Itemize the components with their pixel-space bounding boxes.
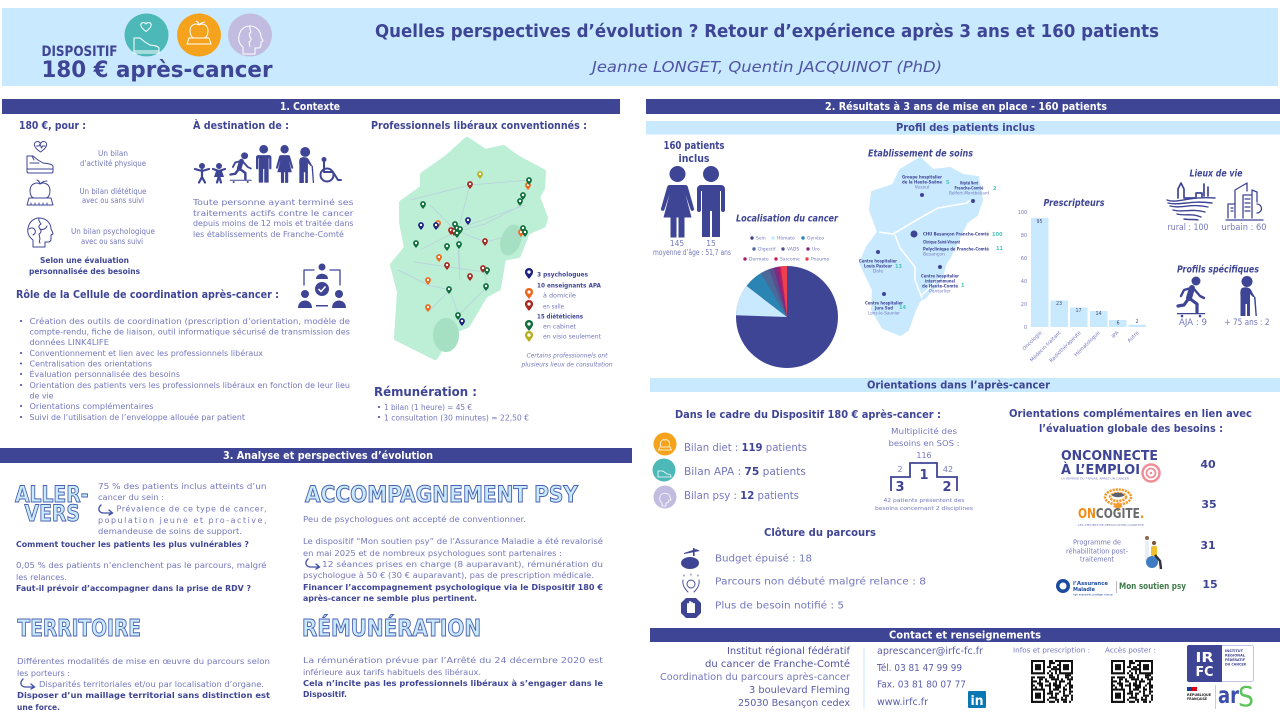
block: territoire: TERRITOIRE xyxy=(18,616,141,642)
logo: assurance maladie: Maladie xyxy=(1073,587,1095,593)
map labels: Besançon xyxy=(923,252,945,258)
logo: onconnecte: LA REPRISE DU TRAVAIL APRÈS UN CANCER xyxy=(1061,476,1129,480)
map labels: 13 xyxy=(895,264,902,270)
block: aller-vers: cancer du sein : xyxy=(98,493,164,502)
chart: prescripteurs: Oncologie xyxy=(1021,330,1043,352)
icon: psy badge xyxy=(228,14,272,56)
map labels: 2 xyxy=(993,186,997,192)
block: orientations complementaires: Orientations complémentaires en lien avec xyxy=(1009,408,1252,420)
icon: psy circle xyxy=(654,486,676,508)
heading: analyse: 3. Analyse et perspectives d’évolution xyxy=(223,450,433,462)
pie legend: Pneumo xyxy=(811,257,829,263)
block: lieux de vie: Lieux de vie xyxy=(1190,168,1243,180)
map labels: Jura Sud xyxy=(874,306,893,312)
block: bilans counts: Bilan psy : 12 patients xyxy=(684,490,799,502)
icon: rural xyxy=(1167,183,1215,220)
logo: onconnecte xyxy=(1061,448,1160,482)
pie legend: Sein xyxy=(756,236,766,242)
address: du cancer de Franche-Comté xyxy=(705,659,850,670)
block: aller-vers: demandeuse de soins de support. xyxy=(98,527,242,536)
text: rehabilitation programme: Programme de xyxy=(1073,538,1121,546)
icon: coordination xyxy=(298,264,346,308)
logo: oncogite: ONCOGITE. xyxy=(1078,507,1144,522)
map legend: 15 diététiciens xyxy=(537,312,583,320)
contact details: Tél. 03 81 47 99 99 xyxy=(876,663,962,674)
block: role de la cellule: Rôle de la Cellule de coordination après-cancer : xyxy=(16,289,279,301)
logo: ars: ar xyxy=(1218,683,1240,709)
heading: resultats xyxy=(646,99,1280,114)
map labels: 11 xyxy=(996,246,1003,252)
qr: infos: Infos et prescription : xyxy=(1013,646,1090,654)
block: patients count: 160 patients xyxy=(664,140,724,152)
contact details: aprescancer@irfc-fc.fr xyxy=(877,646,983,657)
pie legend: Sarcome xyxy=(780,257,800,263)
block: territoire: Différentes modalités de mise en œuvre du parcours selon xyxy=(17,656,270,666)
contact details xyxy=(876,646,983,708)
arrow: psy xyxy=(306,559,320,569)
block: remuneration: Rémunération : xyxy=(374,384,477,399)
block: lieux de vie: rural : 100 xyxy=(1168,223,1208,233)
pie legend: Uro xyxy=(812,247,820,253)
chart: prescripteurs: 80 xyxy=(1021,233,1027,239)
logo: assurance maladie: Mon soutien psy xyxy=(1119,582,1186,592)
chart: prescripteurs: 17 xyxy=(1075,308,1082,314)
map legend: à domicile xyxy=(543,292,576,300)
block: orientations complementaires: 15 xyxy=(1202,578,1218,591)
pie legend: Hémato xyxy=(777,235,795,242)
block: remuneration: 1 consultation (30 minutes) = 22,50 € xyxy=(384,414,529,422)
panel: contact xyxy=(650,628,1280,713)
block: lieux de vie xyxy=(1167,168,1266,233)
map labels: Centre hospitalier xyxy=(859,258,898,264)
heading: contact xyxy=(650,628,1280,642)
logo: ars xyxy=(1215,680,1254,713)
pie slices xyxy=(736,266,838,368)
text: rehabilitation programme: réhabilitation post- xyxy=(1066,548,1129,556)
block: territoire: une force. xyxy=(17,703,60,712)
icon: apa circle xyxy=(652,458,676,482)
audience text: depuis moins de 12 mois et traitée dans xyxy=(193,218,354,228)
block: aller-vers: ALLER- xyxy=(15,483,88,508)
role list: compte-rendu, fiche de liaison, outil informatique sécurisé de transmission des xyxy=(30,326,350,336)
chart: prescripteurs: 2 xyxy=(1135,319,1139,325)
map: etablissements xyxy=(859,148,1003,335)
logo: irfc: FC xyxy=(1196,665,1214,680)
subheading: profil xyxy=(646,121,1280,134)
role list xyxy=(20,316,350,422)
text: rehabilitation programme xyxy=(1066,538,1129,564)
block: cloture du parcours: Budget épuisé : 18 xyxy=(715,552,812,564)
chart: prescripteurs: Médecin traitant xyxy=(1028,329,1062,364)
block: 180 euros pour xyxy=(19,120,155,276)
map legend: en visio seulement xyxy=(543,332,601,340)
header band xyxy=(2,8,1278,86)
map labels: Louis Pasteur xyxy=(864,264,893,270)
block: cloture du parcours: Clôture du parcours xyxy=(764,527,876,539)
map labels: Centre hospitalier xyxy=(865,300,904,306)
icon: exercise figure xyxy=(1145,536,1161,569)
evaluation note xyxy=(29,255,140,276)
block: remuneration analysis: RÉMUNÉRATION xyxy=(302,614,481,642)
address: 25030 Besançon cedex xyxy=(738,698,850,709)
role list: Évaluation personnalisée des besoins xyxy=(30,368,180,379)
block: lieux de vie: urbain : 60 xyxy=(1222,223,1266,233)
chart: besoins podium: besoins concernant 2 disciplines xyxy=(875,506,973,512)
address: 3 boulevard Fleming xyxy=(749,685,850,696)
map labels: de Haute-Comté xyxy=(922,282,958,290)
logo: assurance maladie: Agir ensemble, protéger chacun xyxy=(1073,592,1113,596)
map legend: 3 psychologues xyxy=(537,270,588,278)
block: accompagnement psy: psychologue à 50 € (30 € auparavant), pas de prescription médicale. xyxy=(303,570,594,580)
logo: onconnecte: ONCONNECTE xyxy=(1061,448,1158,464)
text: rehabilitation programme: traitement xyxy=(1080,556,1114,564)
chart: prescripteurs: 23 xyxy=(1056,301,1062,307)
icon: brain xyxy=(28,218,53,247)
map legend: 10 enseignants APA xyxy=(537,282,601,290)
panel: resultats xyxy=(646,99,1280,618)
block: territoire xyxy=(17,616,270,712)
chart: besoins podium: 1 xyxy=(919,468,929,483)
block: accompagnement psy: 12 séances prises en charge (8 auparavant), rémunération du xyxy=(322,559,603,569)
subheading: orientations: Orientations dans l’après-cancer xyxy=(867,380,1051,392)
block: aller-vers: VERS xyxy=(24,502,80,527)
map labels: Lons-le-Saunier xyxy=(868,310,900,316)
chart: prescripteurs: Prescripteurs xyxy=(1044,198,1105,209)
chart: besoins podium: 2 xyxy=(897,465,903,474)
logo: republique francaise: FRANÇAISE xyxy=(1187,697,1207,701)
icon: diet badge xyxy=(177,14,221,56)
logo wordmark xyxy=(42,44,273,83)
chart: prescripteurs: 95 xyxy=(1036,219,1043,225)
block: bilans counts: Bilan diet : 119 patients xyxy=(684,442,807,454)
block: accompagnement psy: Peu de psychologues ont accepté de conventionner. xyxy=(303,514,526,524)
icon: shoe xyxy=(27,142,53,173)
chart: prescripteurs: IPA xyxy=(1111,330,1121,340)
logo: irfc xyxy=(1187,645,1254,682)
map legend: Certains professionnels ont xyxy=(526,352,608,360)
role list: Conventionnement et lien avec les professionnels libéraux xyxy=(30,348,263,358)
icon: skater xyxy=(1177,276,1205,317)
address: Institut régional fédératif xyxy=(727,646,851,657)
block: patients count: moyenne d’âge : 51,7 ans xyxy=(653,248,731,257)
chart: besoins podium: 42 xyxy=(943,465,953,474)
chart: prescripteurs: 6 xyxy=(1116,320,1120,326)
block: aller-vers: Prévalence de ce type de cancer, xyxy=(116,504,266,514)
evaluation note: personnalisée des besoins xyxy=(29,266,140,276)
block: aller-vers xyxy=(15,482,267,593)
block: orientations complementaires xyxy=(1009,408,1252,596)
map legend: en salle xyxy=(543,302,564,310)
role list: Centralisation des orientations xyxy=(30,360,152,368)
chart: besoins podium: besoins en SOS : xyxy=(888,439,960,448)
subheading: orientations xyxy=(650,378,1280,392)
map legend: en cabinet xyxy=(543,322,576,330)
evaluation note: Selon une évaluation xyxy=(40,255,129,265)
icon: people row xyxy=(195,145,341,183)
block: profils specifiques: + 75 ans : 2 xyxy=(1224,318,1270,328)
audience text: les établissements de Franche-Comté xyxy=(193,229,344,239)
map labels xyxy=(859,174,1003,316)
chart: besoins podium xyxy=(875,426,973,512)
block: accompagnement psy: ACCOMPAGNEMENT PSY xyxy=(305,483,579,508)
map legend xyxy=(521,268,613,368)
block: bilans counts: Dans le cadre du Dispositif 180 € après-cancer : xyxy=(675,409,941,421)
role list: Orientation des patients vers les professionnels libéraux en fonction de leur lieu xyxy=(30,380,350,390)
logo: irfc: DU CANCER xyxy=(1225,662,1246,666)
map labels: 5 xyxy=(946,180,950,186)
block: profils specifiques: AJA : 9 xyxy=(1179,318,1207,328)
block: cloture du parcours xyxy=(681,527,926,618)
map labels: CHU Besançon Franche-Comté xyxy=(923,230,989,238)
map: etablissements: Etablissement de soins xyxy=(868,148,973,160)
heading: contact: Contact et renseignements xyxy=(889,630,1041,642)
audience text xyxy=(192,197,354,239)
contact details: www.irfc.fr xyxy=(877,697,928,708)
authors: Jeanne LONGET, Quentin JACQUINOT (PhD) xyxy=(589,58,942,76)
block: accompagnement psy: en mai 2025 et de nombreux psychologues sont partenaires : xyxy=(303,549,562,558)
block: aller-vers: 75 % des patients inclus atteints d’un xyxy=(98,482,266,491)
map labels: Belfort-Montbéliard xyxy=(949,190,989,196)
chart: prescripteurs: 100 xyxy=(1018,210,1027,216)
logo: irfc: INSTITUT xyxy=(1225,649,1244,653)
pie legend: Digestif xyxy=(758,247,776,253)
icon: activity badge xyxy=(124,14,168,56)
block: patients count: 145 xyxy=(670,239,684,248)
role list: de vie xyxy=(30,392,54,400)
block: territoire: Disposer d’un maillage territorial sans distinction est xyxy=(17,691,270,700)
qr: poster: Accès poster : xyxy=(1105,646,1156,654)
block: territoire: Disparités territoriales et/ou par localisation d’organe. xyxy=(39,679,264,689)
block: remuneration analysis: inférieure aux tarifs habituels des libéraux. xyxy=(303,667,481,677)
block: territoire: les porteurs : xyxy=(17,669,70,678)
icon: woman xyxy=(661,166,694,238)
block: remuneration: 1 bilan (1 heure) = 45 € xyxy=(384,403,472,412)
icon: linkedin: in xyxy=(970,694,984,709)
chart: besoins podium: Multiplicité des xyxy=(891,426,957,436)
map labels: Vesoul xyxy=(915,184,929,190)
block: role de la cellule xyxy=(16,264,350,422)
block: professionnels liberaux: Professionnels libéraux conventionnés : xyxy=(371,120,587,132)
block: orientations complementaires: 40 xyxy=(1200,458,1216,471)
bilans labels: Un bilan psychologique xyxy=(71,227,155,236)
block: cloture du parcours: Parcours non débuté malgré relance : 8 xyxy=(715,576,926,588)
chart: besoins podium: 3 xyxy=(895,480,905,495)
pie legend xyxy=(743,235,829,263)
block: bilans counts: Bilan APA : 75 patients xyxy=(684,466,806,478)
heading: contexte xyxy=(2,99,620,114)
map labels: de la Haute-Saône xyxy=(902,178,942,186)
role list: Création des outils de coordination (prescription d’orientation, modèle de xyxy=(30,316,350,326)
pie legend: VADS xyxy=(787,247,799,253)
logo: irfc: RÉGIONAL xyxy=(1225,652,1246,658)
contact details: Fax. 03 81 80 07 77 xyxy=(877,680,966,690)
bilans labels: Un bilan xyxy=(98,149,128,158)
logo: oncogite: LES ATELIERS DE RÉÉDUCATION COGNITIVE xyxy=(1078,522,1144,527)
chart: prescripteurs xyxy=(1018,198,1146,364)
heading: resultats: 2. Résultats à 3 ans de mise en place - 160 patients xyxy=(825,101,1107,113)
logo: irfc: FÉDÉRATIF xyxy=(1225,657,1246,662)
chart: cancer location pie: Localisation du cancer xyxy=(736,214,839,224)
subheading: profil: Profil des patients inclus xyxy=(896,122,1035,134)
map labels: Franche-Comté xyxy=(954,184,984,192)
panel: contexte xyxy=(2,99,620,422)
block: aller-vers: Faut-il prévoir d’accompagner dans la prise de RDV ? xyxy=(16,583,251,593)
chart: prescripteurs: 60 xyxy=(1021,256,1027,262)
pie legend: Gynéco xyxy=(807,235,824,242)
block: a destination de xyxy=(192,119,354,239)
arrow: aller-vers xyxy=(99,505,112,515)
bilans labels: d’activité physique xyxy=(80,159,146,168)
block: accompagnement psy xyxy=(303,483,603,603)
address xyxy=(660,646,851,709)
block: a destination de: À destination de : xyxy=(193,119,289,132)
bilans labels xyxy=(71,149,155,246)
block: remuneration analysis xyxy=(302,614,604,699)
icon: linkedin xyxy=(968,691,986,709)
icon: man xyxy=(697,166,725,237)
chart: prescripteurs: 0 xyxy=(1024,325,1027,331)
logo: ars: S xyxy=(1238,680,1254,713)
map labels: 1 xyxy=(961,283,965,289)
block: patients count xyxy=(653,140,731,257)
logo wordmark: 180 € après-cancer xyxy=(42,58,273,83)
icon: piggy bank xyxy=(681,548,700,569)
panel: analyse xyxy=(0,448,632,712)
qr: poster xyxy=(1105,646,1156,702)
block: remuneration xyxy=(374,384,529,422)
chart: besoins podium: 2 xyxy=(942,480,952,495)
map labels: Clinique Saint-Vincent xyxy=(923,240,961,246)
role list: Orientations complémentaires xyxy=(30,401,154,411)
block: orientations complementaires: 31 xyxy=(1200,539,1216,552)
block: aller-vers: Comment toucher les patients les plus vulnérables ? xyxy=(16,539,249,549)
chart: cancer location pie xyxy=(736,214,839,368)
block: remuneration analysis: La rémunération prévue par l’Arrêté du 24 décembre 2020 est xyxy=(303,655,603,665)
bilans labels: Un bilan diététique xyxy=(80,187,147,196)
block: accompagnement psy: Financer l’accompagnement psychologique via le Dispositif 180 € xyxy=(303,583,603,592)
map labels: Pontarlier xyxy=(929,288,951,294)
logo: irfc: IR xyxy=(1196,651,1214,666)
chart: prescripteurs: Hématologue xyxy=(1073,329,1101,358)
map labels: Centre hospitalier xyxy=(921,274,960,280)
arrow: territoire xyxy=(21,679,34,689)
block: profils specifiques xyxy=(1177,264,1270,328)
logo: oncogite xyxy=(1078,490,1144,527)
block: aller-vers: les relances. xyxy=(16,573,67,582)
bilans labels: avec ou sans suivi xyxy=(82,196,144,205)
role list: Suivi de l’utilisation de l’enveloppe allouée par patient xyxy=(30,412,245,422)
block: orientations complementaires: l’évaluation globale des besoins : xyxy=(1039,423,1223,435)
map legend: plusieurs lieux de consultation xyxy=(521,362,613,368)
chart: prescripteurs: 14 xyxy=(1095,311,1102,317)
map labels: Polyclinique de Franche-Comté xyxy=(923,246,989,252)
chart: prescripteurs: 40 xyxy=(1021,279,1027,285)
block: accompagnement psy: après-cancer ne semble plus pertinent. xyxy=(303,593,477,603)
chart: prescripteurs: Radiothérapeute xyxy=(1048,329,1082,364)
block: cloture du parcours: Plus de besoin notifié : 5 xyxy=(715,600,844,612)
block: accompagnement psy: Le dispositif “Mon soutien psy” de l’Assurance Maladie a été revalorisé xyxy=(303,536,603,546)
block: patients count: 15 xyxy=(706,239,716,248)
qr: infos xyxy=(1013,646,1090,702)
icon: stop hand xyxy=(681,598,701,618)
map labels: 100 xyxy=(992,232,1003,238)
map: franche-comte professionals xyxy=(393,140,545,357)
chart: prescripteurs: Autre xyxy=(1127,330,1140,344)
logo: republique francaise: RÉPUBLIQUE xyxy=(1187,692,1212,697)
block: patients count: inclus xyxy=(678,153,710,165)
icon: urban xyxy=(1226,183,1263,220)
pie legend: Dermato xyxy=(749,257,769,263)
map labels: intercommunal xyxy=(925,278,955,284)
audience text: traitements actifs contre le cancer xyxy=(193,209,354,218)
block: remuneration analysis: Dispositif. xyxy=(303,690,347,699)
heading: contexte: 1. Contexte xyxy=(280,101,340,113)
icon: confused person xyxy=(683,574,699,592)
chart: prescripteurs: 20 xyxy=(1021,302,1027,308)
bilans labels: avec ou sans suivi xyxy=(81,237,143,246)
address: Coordination du parcours après-cancer xyxy=(660,672,850,683)
block: professionnels liberaux xyxy=(371,120,613,368)
logo: republique francaise xyxy=(1187,687,1212,701)
logo wordmark: DISPOSITIF xyxy=(42,44,118,60)
chart: besoins podium: 42 patients présentent des xyxy=(884,497,965,504)
block: bilans counts xyxy=(652,409,941,508)
block: orientations complementaires: 35 xyxy=(1201,498,1217,511)
block: aller-vers: population jeune et pro-active, xyxy=(98,516,266,525)
map labels: Hôpital Nord xyxy=(960,180,978,186)
icon: elder xyxy=(1240,276,1257,316)
role list: données LINK4LIFE xyxy=(30,337,109,347)
icon: diet circle xyxy=(654,432,676,456)
audience text: Toute personne ayant terminé ses xyxy=(192,197,354,207)
map labels: Groupe hospitalier xyxy=(902,174,943,180)
block: 180 euros pour: 180 €, pour : xyxy=(19,120,86,132)
chart: besoins podium: 116 xyxy=(916,451,932,460)
logo: assurance maladie: l’Assurance xyxy=(1073,581,1108,587)
logo: assurance maladie xyxy=(1056,579,1186,596)
block: profils specifiques: Profils spécifiques xyxy=(1177,264,1259,276)
heading: analyse xyxy=(0,448,632,463)
block: aller-vers: 0,05 % des patients n’enclenchent pas le parcours, malgré xyxy=(16,560,267,570)
map labels: 14 xyxy=(899,305,906,311)
icon: apple xyxy=(27,180,53,205)
logo: onconnecte: À L’EMPLOI xyxy=(1061,461,1140,478)
title: Quelles perspectives d’évolution ? Retour d’expérience après 3 ans et 160 patients xyxy=(375,21,1159,42)
block: remuneration analysis: Cela n’incite pas les professionnels libéraux à s’engager dans le xyxy=(303,678,604,688)
map labels: Dole xyxy=(873,268,883,274)
